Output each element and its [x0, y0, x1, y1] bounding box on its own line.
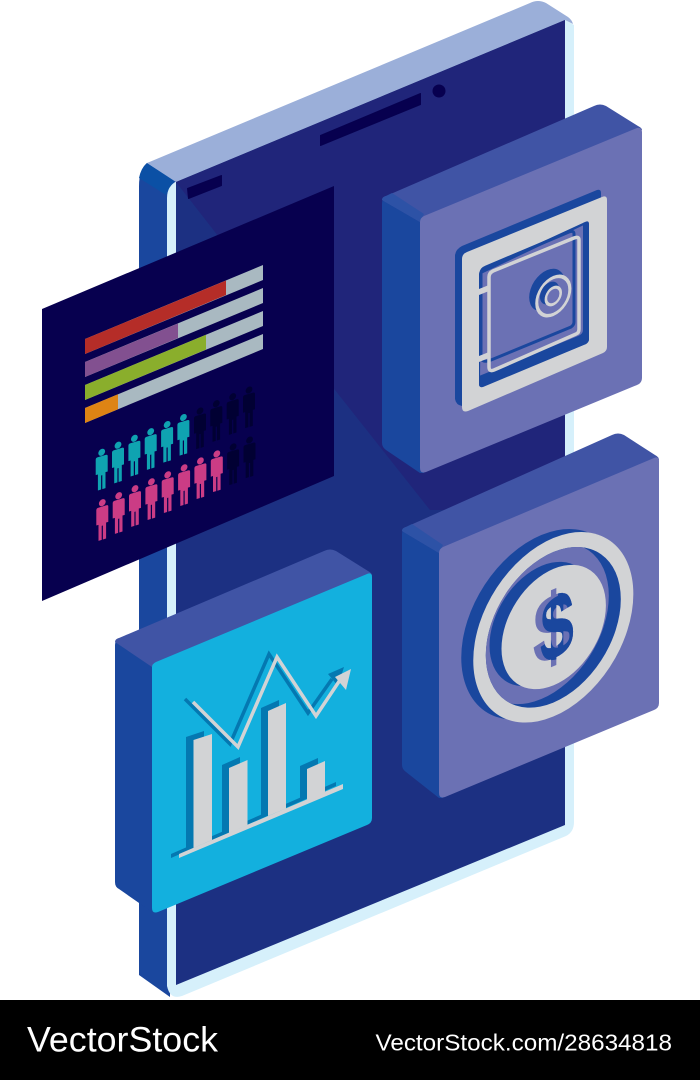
footer image id: VectorStock.com/28634818 [376, 1030, 672, 1056]
door shadow [481, 231, 574, 361]
bar 3 [85, 311, 263, 400]
footer logo: VectorStock [27, 1021, 219, 1060]
safe cavity shadow [479, 222, 589, 387]
safe shadow [455, 190, 601, 406]
panel: chart tile [115, 550, 372, 912]
tile side [402, 527, 443, 798]
tile front [420, 128, 642, 472]
chart shadow [171, 654, 344, 858]
chart baseline [179, 784, 343, 858]
tile corner highlight [402, 524, 443, 553]
door outline [489, 237, 579, 371]
bar 2 [85, 288, 263, 377]
camera [432, 84, 446, 98]
progress bars [85, 265, 263, 423]
safe dial [529, 263, 570, 321]
panel: safe tile [382, 104, 642, 473]
panel: data dashboard [42, 186, 334, 601]
people row: pink [96, 435, 256, 542]
icon: bar and line chart [171, 654, 351, 858]
coin disc [502, 547, 606, 707]
coin disc shadow [490, 544, 594, 704]
phone front bezel [167, 20, 574, 997]
phone side corner highlight [139, 163, 175, 195]
trend arrowhead [335, 669, 351, 690]
coin recess [486, 547, 621, 708]
tile top [402, 434, 659, 553]
coin shadow [461, 502, 621, 747]
trend line [193, 657, 340, 747]
safe frame [462, 196, 607, 412]
phone side face [139, 163, 177, 997]
tile corner highlight [382, 193, 424, 222]
dollar sign [534, 588, 574, 668]
coin ring [473, 505, 633, 750]
sensor slot [188, 176, 222, 198]
bar 1 [85, 265, 263, 354]
speaker slot [320, 94, 420, 146]
tile top [382, 104, 642, 222]
tile top [115, 550, 372, 667]
screen upper shade [176, 20, 565, 510]
dollar sign: $ [534, 567, 573, 686]
footer bar [0, 1000, 700, 1080]
bar 4 [85, 334, 263, 423]
icon: safe [455, 190, 607, 412]
tile side [115, 638, 156, 912]
safe cavity [480, 224, 588, 385]
tile front [439, 457, 659, 798]
phone top edge [147, 1, 573, 182]
panel: coin tile [402, 434, 659, 798]
smartphone [139, 1, 574, 997]
icon: dollar coin [461, 529, 634, 722]
tile front [152, 573, 372, 912]
phone screen [176, 20, 565, 985]
hinges [479, 285, 489, 362]
dollar sign: $ [541, 566, 580, 685]
panel background [42, 186, 334, 601]
chart bars [194, 703, 325, 848]
tile side [382, 196, 424, 473]
people row: teal [96, 385, 255, 491]
